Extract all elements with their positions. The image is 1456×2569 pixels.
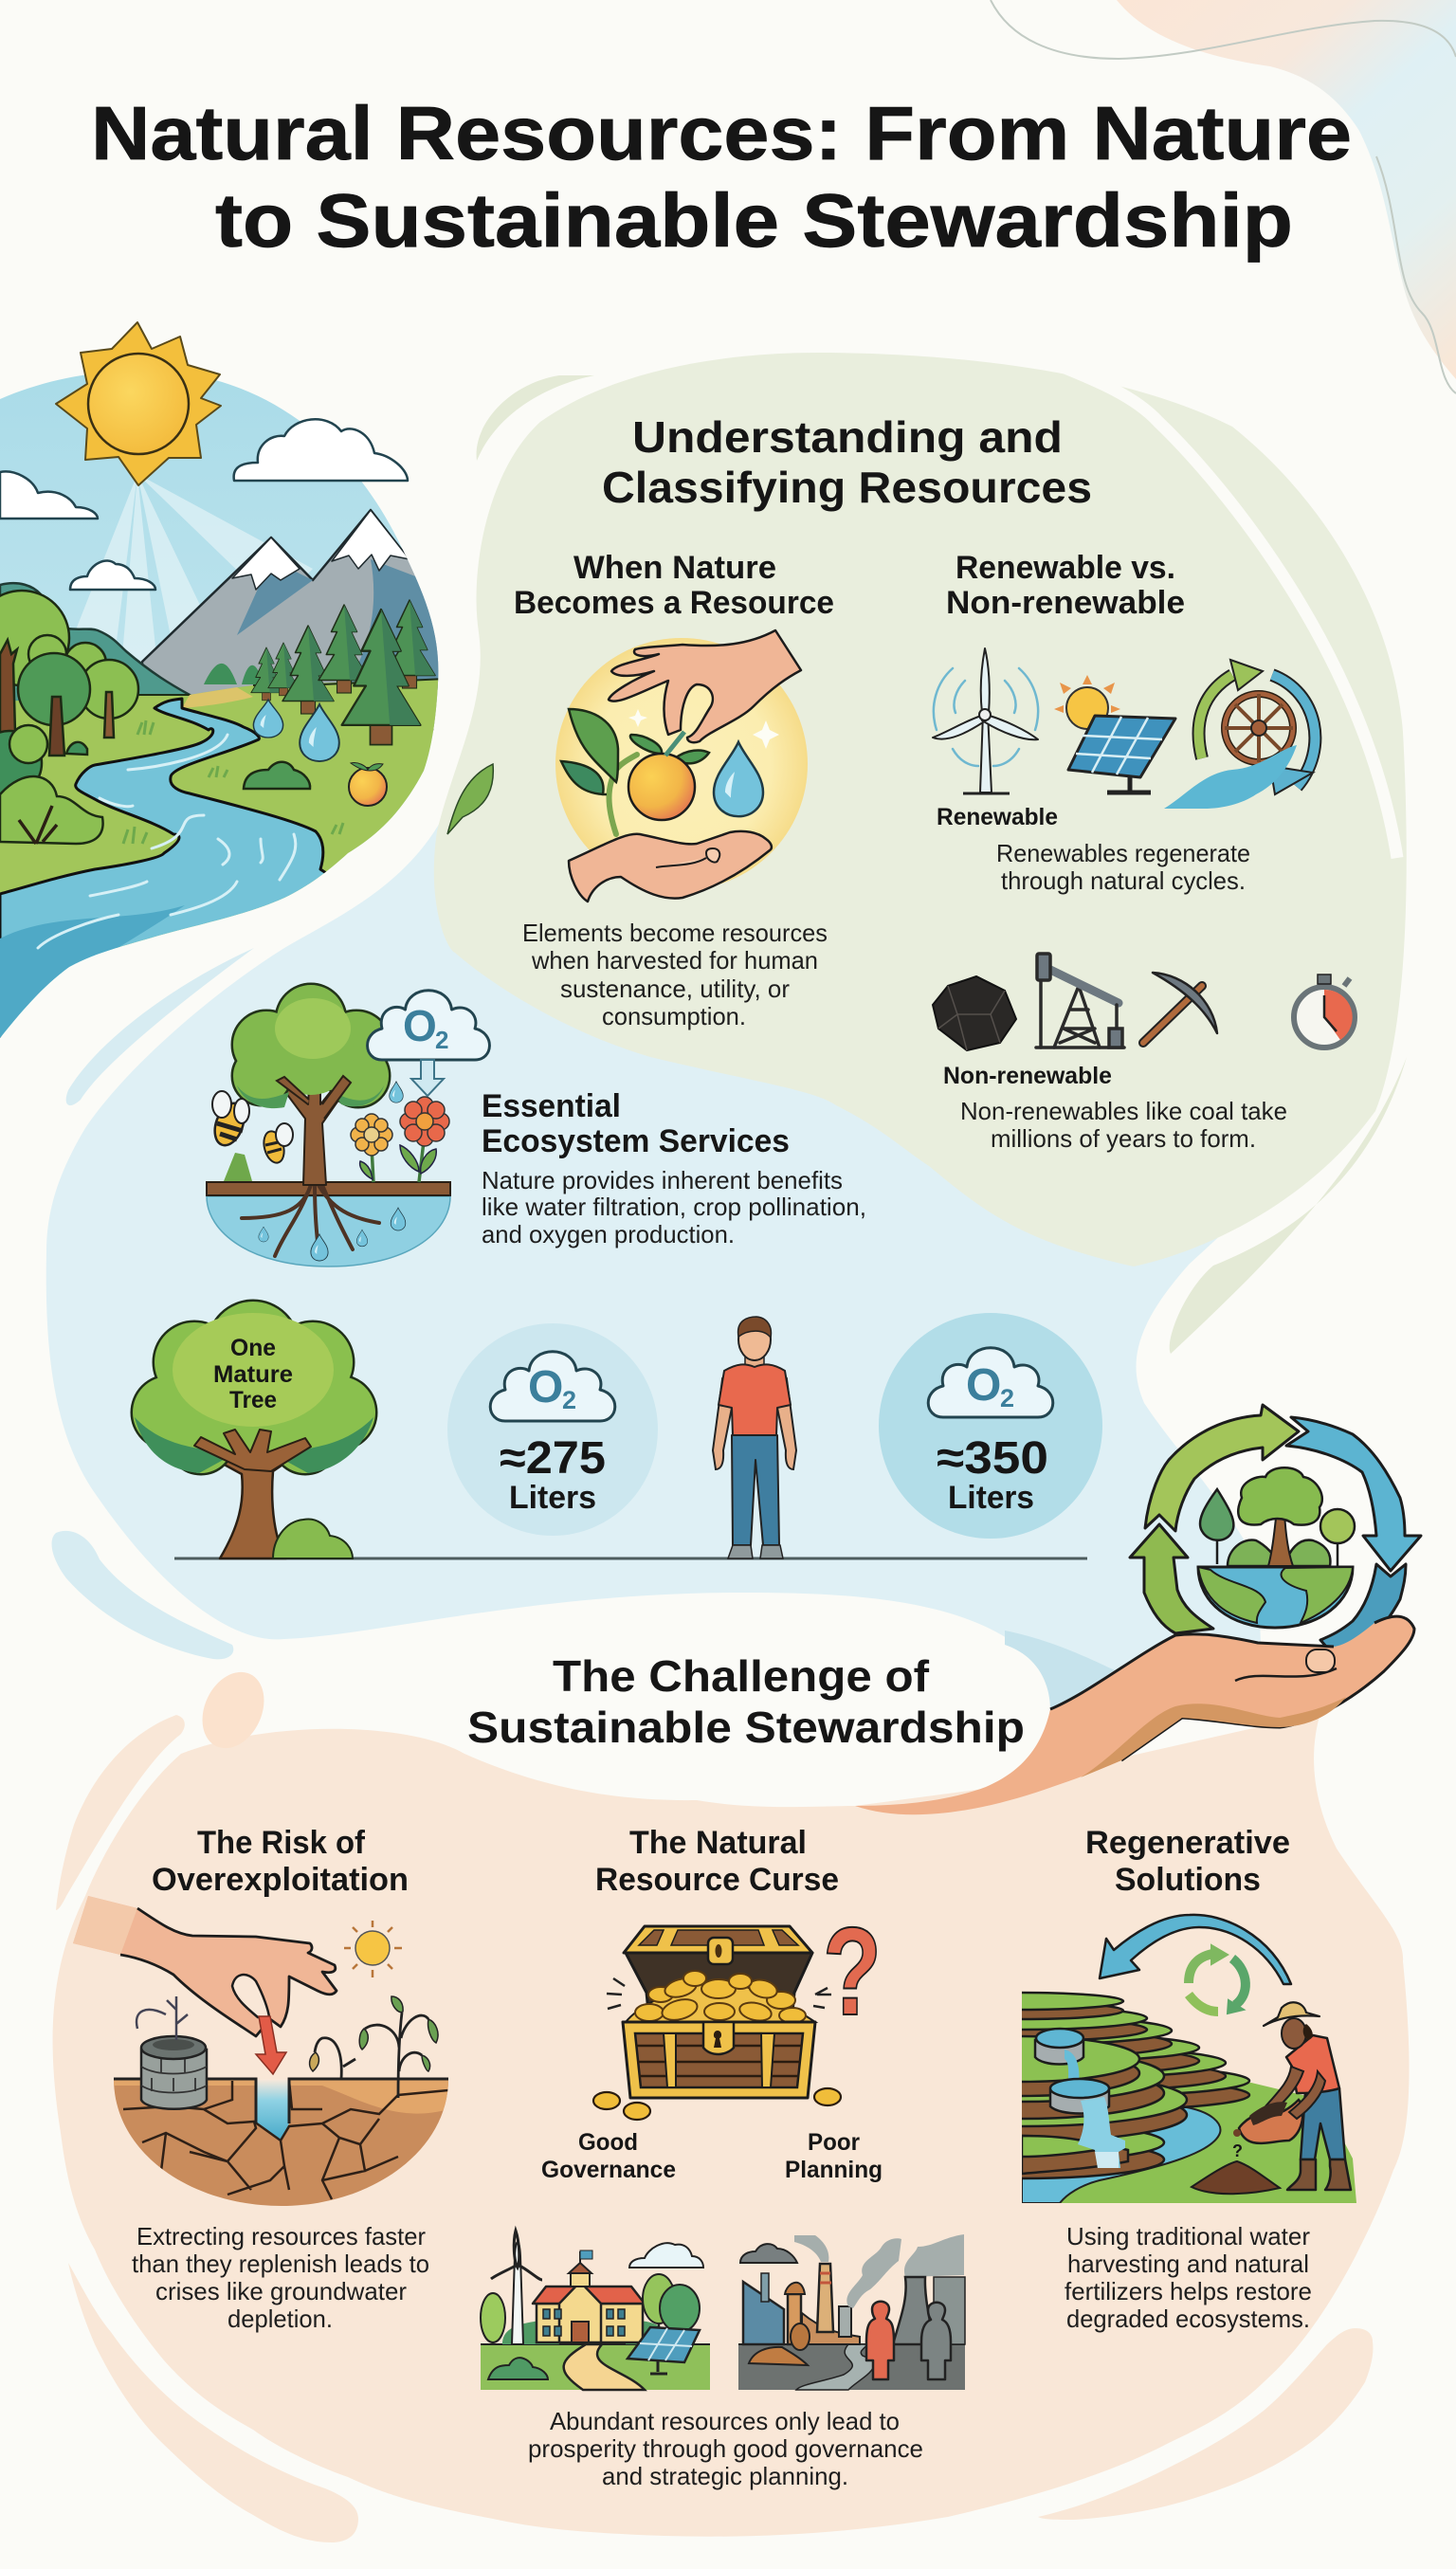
icon: wind turbine	[933, 648, 1038, 793]
smoke	[794, 2234, 964, 2308]
label: good governance: Governance	[541, 2157, 676, 2183]
red arrow	[256, 2016, 286, 2074]
icon: O2 cloud with arrow: O	[403, 1001, 437, 1050]
text: resource curse description	[528, 2407, 923, 2490]
title: to Sustainable Stewardship	[215, 178, 1293, 263]
peach strip lower right	[1038, 2328, 1373, 2520]
peach background blob	[53, 1713, 1410, 2537]
heading: regenerative solutions: Solutions	[1115, 1862, 1261, 1898]
text: regenerative description: degraded ecosystems.	[1066, 2305, 1310, 2333]
text: regenerative description	[1065, 2222, 1312, 2333]
heading: the natural resource curse: Resource Curse	[595, 1862, 839, 1898]
label: one mature tree: One	[230, 1335, 276, 1361]
text: regenerative description: harvesting and natural	[1067, 2250, 1309, 2278]
icon: stone well	[141, 2036, 207, 2109]
heading: regenerative solutions	[1085, 1825, 1290, 1898]
apple	[349, 763, 387, 806]
soil mound	[1192, 2161, 1280, 2194]
text: when nature description	[522, 919, 828, 1030]
stat: person needs 350 liters: 2	[1000, 1384, 1014, 1412]
icon: person	[713, 1317, 796, 1558]
text: regenerative description: Using traditional water	[1066, 2222, 1310, 2250]
icon: stopwatch	[1294, 975, 1355, 1048]
mountains	[142, 510, 446, 730]
green crescent	[477, 375, 594, 461]
back hills	[0, 582, 191, 701]
icon: cloud small	[70, 561, 155, 590]
icon: regenerative farming scene	[1022, 1913, 1356, 2203]
icon: treasure chest	[593, 1902, 882, 2120]
river	[1022, 2107, 1220, 2203]
text: when nature description: when harvested for human	[531, 946, 818, 975]
label: one mature tree: Mature	[213, 1361, 293, 1388]
text: resource curse description: Abundant resources only lead to	[550, 2407, 900, 2435]
icon: small sun	[344, 1921, 402, 1977]
heading: the natural resource curse: The Natural	[629, 1825, 807, 1861]
stat: person needs 350 liters: O	[966, 1360, 1001, 1411]
text: ecosystem description: Nature provides inherent benefits	[482, 1166, 843, 1194]
peach strip upper left	[56, 1715, 185, 1910]
ground line	[174, 1557, 1087, 1560]
icon: overexploitation scene	[73, 1896, 464, 2209]
text: when nature description: consumption.	[602, 1002, 746, 1030]
hand	[855, 1616, 1414, 1814]
heading: the challenge of sustainable stewardship: Sustainable Stewardship	[467, 1703, 1025, 1752]
subheading: renewable vs non-renewable: Renewable vs.	[956, 550, 1175, 586]
heading: essential ecosystem services	[482, 1088, 790, 1159]
title	[91, 91, 1352, 263]
illustration: poor planning factory	[738, 2234, 965, 2390]
icon: coal	[933, 976, 1016, 1050]
text: non-renewable description: millions of years to form.	[991, 1124, 1256, 1153]
grass	[123, 720, 343, 844]
label: good governance	[541, 2129, 676, 2183]
meadow	[1061, 2083, 1356, 2203]
heading: the risk of overexploitation: Overexploitation	[152, 1862, 409, 1898]
green cycle arrows	[1130, 1405, 1299, 1633]
conifers	[204, 664, 264, 684]
text: non-renewable description	[960, 1097, 1287, 1153]
blue strip upper left	[66, 948, 254, 1105]
icon: hands with apple and water drop	[555, 630, 808, 902]
illustration: good governance town	[481, 2231, 710, 2390]
label: poor planning: Poor	[808, 2129, 860, 2156]
panel: understanding and classifying resources	[434, 353, 1407, 1354]
label: one mature tree	[213, 1335, 293, 1413]
icons: renewable energy	[933, 648, 1315, 809]
grey person	[921, 2303, 951, 2379]
text: overexploitation description	[132, 2222, 429, 2333]
text: ecosystem description: like water filtration, crop pollination,	[482, 1193, 866, 1221]
panel: the challenge of sustainable stewardship	[53, 1662, 1410, 2542]
label: poor planning	[785, 2129, 883, 2183]
icon: small bee	[261, 1123, 293, 1165]
stat: tree produces 275 liters: 2	[562, 1386, 576, 1414]
polluted river	[796, 2344, 874, 2390]
loose leaf	[447, 764, 493, 834]
text: non-renewable description: Non-renewables like coal take	[960, 1097, 1287, 1125]
text: when nature description: Elements become resources	[522, 919, 828, 947]
terraces front	[1022, 2151, 1166, 2180]
label: good governance: Good	[578, 2129, 638, 2156]
text: renewable description: through natural cycles.	[1001, 866, 1246, 895]
subheading: when nature becomes a resource: When Nature	[573, 550, 776, 586]
heading: the natural resource curse	[595, 1825, 839, 1898]
blue cycle arrows	[1286, 1417, 1421, 1662]
heading: the risk of overexploitation	[152, 1825, 409, 1898]
icon: cloud right	[234, 419, 408, 481]
icon: oil pump	[1036, 954, 1124, 1048]
icon: bee	[209, 1091, 249, 1149]
blue strip lower left	[52, 1531, 233, 1659]
water features	[1035, 2029, 1125, 2168]
panel: nature landscape	[0, 322, 455, 1062]
stat: tree produces 275 liters	[447, 1323, 658, 1536]
plants	[315, 2013, 428, 2098]
label: one mature tree: Tree	[229, 1387, 277, 1413]
label: non-renewable: Non-renewable	[943, 1063, 1112, 1089]
red person	[866, 2302, 894, 2379]
icon: O2 cloud with arrow: 2	[435, 1026, 448, 1054]
stat: tree produces 275 liters: ≈275	[500, 1433, 606, 1484]
stat: person needs 350 liters: Liters	[948, 1480, 1034, 1516]
lower hand	[569, 831, 772, 902]
icon: water wheel	[1164, 660, 1315, 809]
text: overexploitation description: than they replenish leads to	[132, 2250, 429, 2278]
heading: understanding and classifying: Understanding and	[632, 412, 1063, 462]
heading: understanding and classifying: Classifying Resources	[602, 463, 1092, 512]
heading: the challenge of sustainable stewardship	[467, 1651, 1025, 1752]
river	[0, 698, 326, 1038]
subheading: renewable vs non-renewable: Non-renewable	[946, 585, 1185, 621]
label: renewable: Renewable	[937, 804, 1058, 830]
text: ecosystem description: and oxygen production.	[482, 1220, 735, 1248]
blue background blob	[46, 796, 1327, 1716]
green lower strip	[1170, 1057, 1407, 1354]
icon: O2 cloud with arrow	[368, 991, 489, 1096]
text: overexploitation description: depletion.	[228, 2305, 333, 2333]
icon: recycle loop	[1189, 1945, 1246, 2013]
icon: farmer	[1192, 2002, 1351, 2194]
ground	[0, 679, 446, 948]
bottom terrace over	[1022, 2136, 1128, 2174]
heading: essential ecosystem services: Essential	[482, 1088, 621, 1124]
icon: pickaxe	[1143, 973, 1217, 1043]
dirt pile	[749, 2347, 808, 2365]
panel: ecosystem services and oxygen comparison	[46, 796, 1327, 1716]
icon: hand holding globe and cycle arrows	[855, 1405, 1421, 1814]
subheading: renewable vs non-renewable	[946, 550, 1185, 621]
globe and trees	[1198, 1467, 1355, 1628]
question mark: ?	[823, 1902, 882, 2041]
arrow: water cycle	[1100, 1915, 1291, 1984]
text: overexploitation description: crises like groundwater	[155, 2277, 407, 2305]
text: when nature description: sustenance, utility, or	[560, 975, 790, 1003]
icon: cloud left	[0, 471, 98, 519]
blue band under title	[1005, 1631, 1115, 1711]
stat: tree produces 275 liters: Liters	[509, 1480, 596, 1516]
icon: farmer: ?	[1232, 2141, 1243, 2160]
peach dot	[191, 1662, 276, 1758]
green background blob	[434, 353, 1407, 1266]
icon: sun and solar panel	[1054, 675, 1175, 793]
title: Natural Resources: From Nature	[91, 91, 1352, 175]
subheading: when nature becomes a resource: Becomes a Resource	[514, 585, 834, 621]
label: poor planning: Planning	[785, 2157, 883, 2183]
apple branch	[609, 755, 637, 834]
corner decoration	[991, 0, 1456, 393]
stat: person needs 350 liters	[879, 1313, 1102, 1539]
heading: understanding and classifying	[602, 412, 1092, 512]
text: overexploitation description: Extrecting resources faster	[136, 2222, 426, 2250]
heading: essential ecosystem services: Ecosystem Services	[482, 1123, 790, 1159]
stat: tree produces 275 liters: O	[528, 1362, 563, 1412]
icon: one mature tree	[133, 1302, 375, 1558]
heading: regenerative solutions: Regenerative	[1085, 1825, 1290, 1861]
heading: the challenge of sustainable stewardship: The Challenge of	[553, 1651, 930, 1701]
icon: ecosystem tree with roots	[207, 985, 489, 1266]
icon: sun	[56, 322, 221, 485]
icon: flowers	[351, 1097, 449, 1182]
icons: non-renewable resources	[933, 954, 1355, 1050]
upper hand	[609, 630, 801, 742]
hand reaching down	[73, 1896, 337, 2036]
heading: the risk of overexploitation: The Risk of	[197, 1825, 366, 1861]
peach strip lower left	[68, 2263, 358, 2542]
subheading: when nature becomes a resource	[514, 550, 834, 621]
terraces back	[1022, 1991, 1251, 2180]
text: renewable description	[996, 839, 1250, 895]
bush	[244, 762, 310, 789]
text: resource curse description: and strategic planning.	[602, 2462, 848, 2490]
stat: person needs 350 liters: ≈350	[937, 1433, 1048, 1484]
round trees	[0, 591, 138, 844]
text: ecosystem description	[482, 1166, 866, 1248]
text: resource curse description: prosperity through good governance	[528, 2434, 923, 2463]
text: renewable description: Renewables regenerate	[996, 839, 1250, 867]
text: regenerative description: fertilizers helps restore	[1065, 2277, 1312, 2305]
